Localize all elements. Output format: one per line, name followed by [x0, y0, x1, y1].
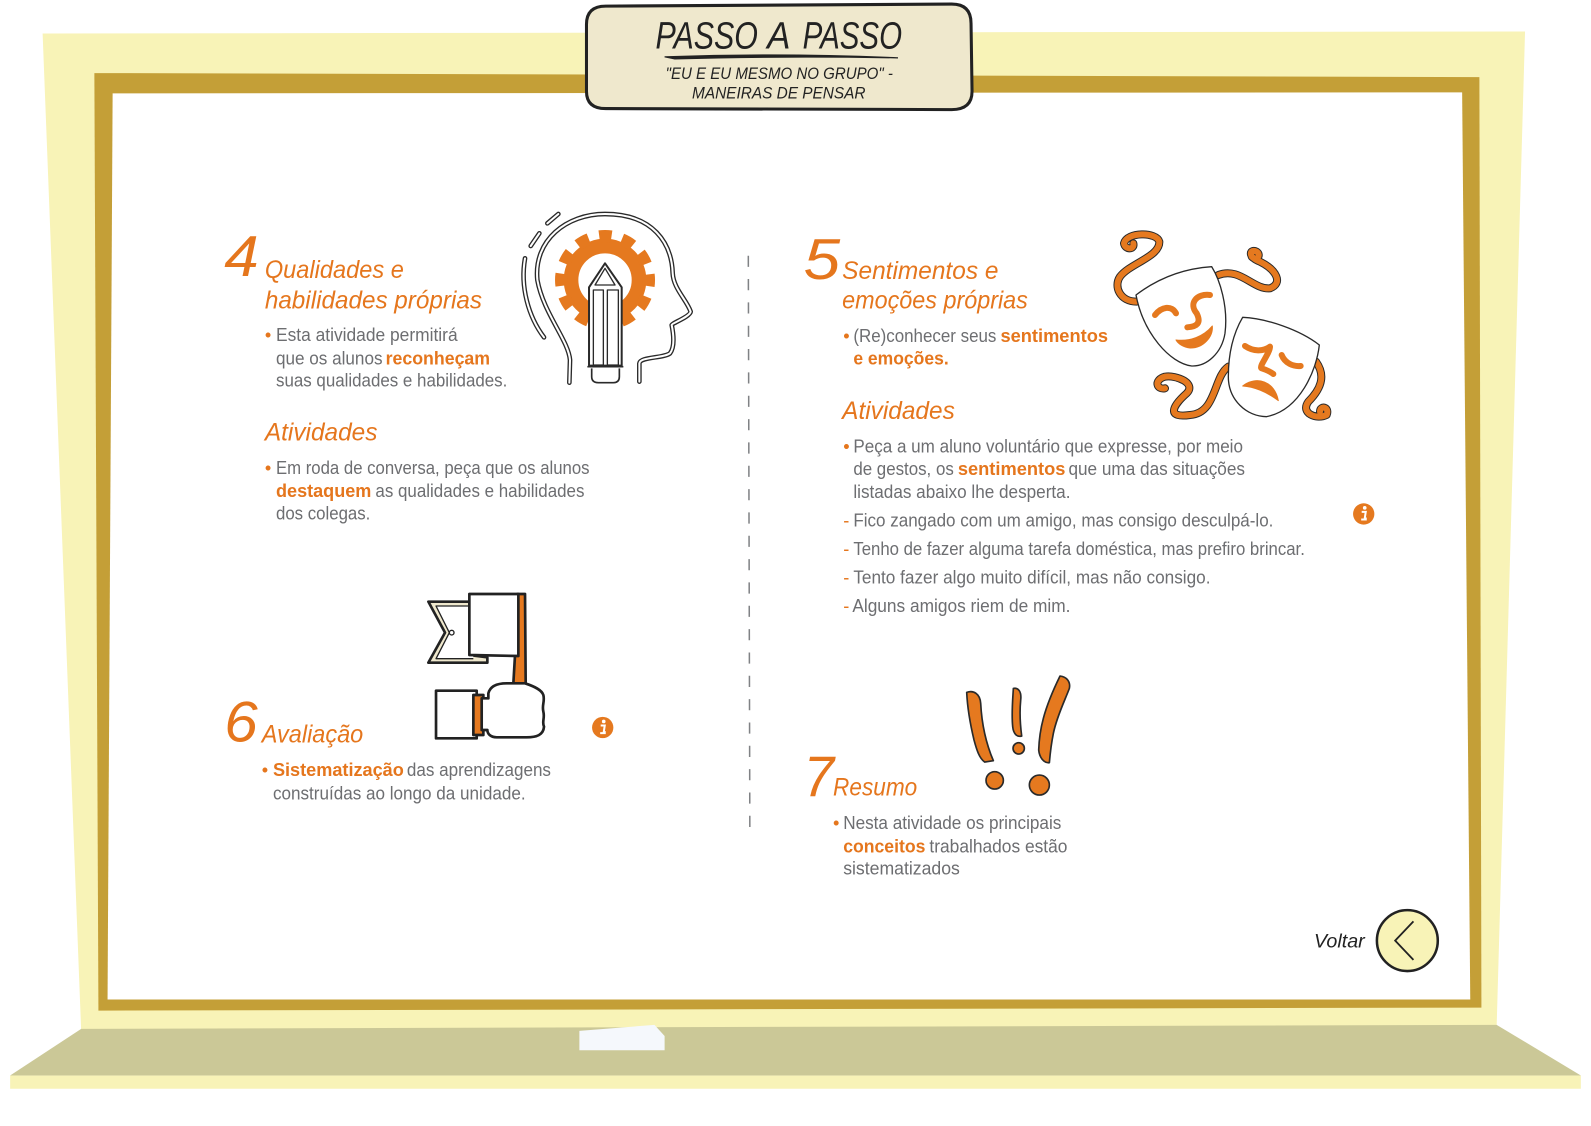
title panel — [586, 4, 972, 110]
text block 5: sentimentos — [1000, 325, 1108, 346]
heading 4: habilidades próprias — [265, 286, 482, 314]
activities heading 5: Atividades — [840, 397, 955, 425]
activities text 4: dos colegas. — [276, 503, 370, 524]
heading 4: Qualidades e — [265, 256, 404, 284]
icon: head with gear and pencil — [524, 214, 691, 383]
text block 6: • — [262, 759, 268, 780]
title underline — [665, 55, 898, 59]
activities text 5: - — [843, 566, 849, 587]
title: A — [765, 15, 790, 57]
text block 6 — [262, 759, 551, 804]
text block 6: Sistematização — [273, 759, 404, 780]
text block 5: e emoções. — [853, 347, 949, 368]
heading 5: emoções próprias — [842, 286, 1028, 314]
text block 4: suas qualidades e habilidades. — [276, 370, 507, 391]
heading 4 — [265, 256, 482, 314]
number 6: 6 — [224, 691, 259, 755]
back label: Voltar — [1314, 932, 1366, 953]
subtitle: "EU E EU MESMO NO GRUPO" - — [666, 65, 893, 83]
number 5: 5 — [804, 228, 841, 292]
text block 7 — [833, 812, 1067, 879]
activities text 4: Em roda de conversa, peça que os alunos — [276, 457, 590, 478]
text block 5 — [843, 325, 1108, 368]
activities text 5: Fico zangado com um amigo, mas consigo desculpá-lo. — [853, 510, 1273, 531]
heading 5: Sentimentos e — [842, 257, 998, 285]
back arrow circle — [1377, 910, 1438, 971]
subtitle — [666, 65, 893, 102]
center dashed divider — [748, 256, 750, 830]
text block 4: reconheçam — [386, 347, 490, 368]
activities text 5: - — [843, 595, 849, 616]
back button — [1314, 910, 1438, 971]
text block 7: conceitos — [843, 835, 925, 856]
info icon right — [1353, 503, 1374, 525]
info icon left — [592, 717, 613, 738]
number 4: 4 — [224, 225, 259, 289]
text block 7: trabalhados estão — [929, 835, 1067, 856]
section 6 — [224, 691, 551, 804]
icon: exclamation marks — [967, 676, 1070, 795]
activities text 5: Tenho de fazer alguma tarefa doméstica, mas prefiro brincar. — [853, 538, 1305, 559]
title: PASSO — [655, 15, 758, 57]
activities heading 4: Atividades — [263, 418, 378, 446]
text block 7: Nesta atividade os principais — [843, 812, 1061, 833]
chalk shelf — [10, 1025, 1581, 1089]
text block 4: • — [265, 324, 271, 345]
icon: hand holding flag — [428, 594, 544, 738]
activities text 5: sentimentos — [958, 458, 1065, 479]
title — [655, 15, 902, 57]
text block 7: • — [833, 812, 839, 833]
activities text 5: listadas abaixo lhe desperta. — [853, 481, 1070, 502]
text block 4: Esta atividade permitirá — [276, 324, 458, 345]
text block 5: (Re)conhecer seus — [853, 325, 996, 346]
activities text 5: Alguns amigos riem de mim. — [852, 595, 1070, 616]
text block 4: que os alunos — [276, 347, 383, 368]
activities text 4: • — [265, 457, 271, 478]
section 5 — [804, 228, 1305, 616]
text block 7: sistematizados — [843, 858, 960, 879]
activities text 5: Peça a um aluno voluntário que expresse, por meio — [853, 436, 1243, 457]
activities text 5: • — [843, 436, 850, 457]
activities text 4: destaquem — [276, 480, 371, 501]
text block 5: • — [843, 325, 850, 346]
section 7 — [804, 746, 1067, 879]
text block 6: das aprendizagens — [407, 759, 551, 780]
icon: theater masks — [1117, 234, 1327, 417]
activities text 5: que uma das situações — [1068, 458, 1245, 479]
title: PASSO — [803, 15, 902, 57]
activities text 5: - — [843, 510, 849, 531]
number 7: 7 — [804, 746, 836, 810]
heading 5 — [842, 257, 1028, 314]
heading 6: Avaliação — [260, 721, 363, 749]
activities text 5: Tento fazer algo muito difícil, mas não consigo. — [853, 566, 1210, 587]
subtitle: MANEIRAS DE PENSAR — [692, 84, 866, 102]
text block 4 — [265, 324, 507, 391]
activities text 5: de gestos, os — [853, 458, 954, 479]
activities text 5 — [843, 436, 1305, 616]
chalk piece — [579, 1025, 665, 1050]
section 4 — [224, 225, 590, 524]
activities text 4 — [265, 457, 590, 524]
activities text 4: as qualidades e habilidades — [375, 480, 584, 501]
heading 7: Resumo — [833, 774, 917, 802]
text block 6: construídas ao longo da unidade. — [273, 783, 526, 804]
activities text 5: - — [843, 538, 849, 559]
